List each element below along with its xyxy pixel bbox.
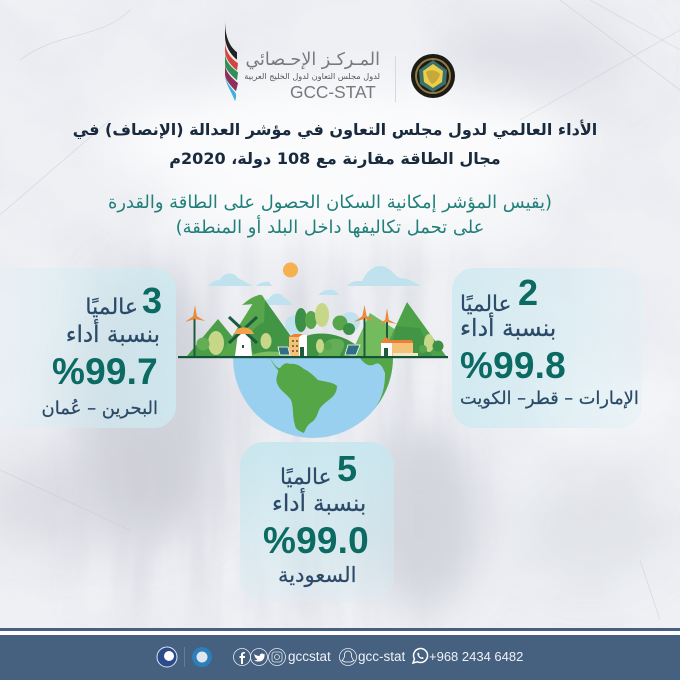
- handle: gcc-stat: gcc-stat: [358, 649, 405, 664]
- footer thin bar: [0, 628, 680, 631]
- farm building: [380, 337, 418, 356]
- ground line: [178, 356, 448, 358]
- icon: whatsapp: [412, 648, 428, 664]
- countries: الإمارات – قطر– الكويت: [460, 389, 639, 409]
- solar panels: [278, 345, 360, 355]
- description line 2: على تحمل تكاليفها داخل البلد أو المنطقة): [176, 217, 484, 238]
- country: السعودية: [278, 563, 356, 587]
- clouds: [208, 266, 421, 335]
- rank label: عالميًا: [460, 292, 511, 317]
- description line 1: (يقيس المؤشر إمكانية السكان الحصول على الطاقة والقدرة: [108, 192, 552, 213]
- icon: snapchat: [339, 648, 357, 666]
- logo: GCC-STAT: [225, 22, 455, 102]
- globe: [233, 358, 393, 438]
- windmill: [229, 317, 257, 356]
- card: rank 2 UAE Qatar Kuwait: [452, 268, 642, 428]
- hills: [187, 295, 446, 356]
- title line 2: مجال الطاقة مقارنة مع 108 دولة، 2020م: [169, 149, 501, 168]
- percentage: %99.7: [52, 351, 158, 392]
- rank label: عالميًا: [85, 295, 138, 320]
- handle: gccstat: gccstat: [288, 649, 331, 664]
- description: [108, 192, 552, 238]
- icons: social media: [233, 648, 286, 666]
- rank number: 5: [337, 448, 357, 489]
- logo Arabic subtitle: لدول مجلس التعاون لدول الخليج العربية: [244, 71, 380, 81]
- icon: certification badges: [156, 646, 212, 668]
- percentage: %99.0: [263, 520, 369, 561]
- house: [288, 334, 307, 356]
- rank number: 2: [518, 272, 538, 313]
- rank number: 3: [142, 280, 162, 321]
- logo Arabic name: المـركـز الإحـصائي: [245, 50, 380, 70]
- logo ribbon: [225, 22, 238, 102]
- rank label: عالميًا: [280, 465, 331, 490]
- logo GCC-STAT wordmark: GCC-STAT: [290, 82, 376, 102]
- continent: right edge: [360, 358, 393, 408]
- footer: [0, 628, 680, 680]
- percentage: %99.8: [460, 345, 566, 386]
- performance label: بنسبة أداء: [272, 491, 366, 517]
- GCC emblem: [411, 54, 455, 98]
- trees: [196, 303, 444, 355]
- footer band: [0, 635, 680, 680]
- sun: [283, 262, 298, 278]
- wind turbines: [185, 305, 397, 356]
- logo divider: [395, 56, 396, 102]
- performance label: بنسبة أداء: [66, 322, 160, 348]
- countries: البحرين – عُمان: [42, 398, 158, 419]
- continent: South America: [270, 358, 337, 433]
- title line 1: الأداء العالمي لدول مجلس التعاون في مؤشر العدالة (الإنصاف) في: [73, 120, 597, 139]
- illustration: green energy landscape on globe: [178, 262, 448, 438]
- title: [73, 120, 597, 168]
- card: rank 5 Saudi Arabia: [240, 442, 394, 602]
- performance label: بنسبة أداء: [460, 314, 556, 342]
- card: rank 3 Bahrain Oman: [0, 268, 176, 428]
- phone number: +968 2434 6482: [429, 649, 523, 664]
